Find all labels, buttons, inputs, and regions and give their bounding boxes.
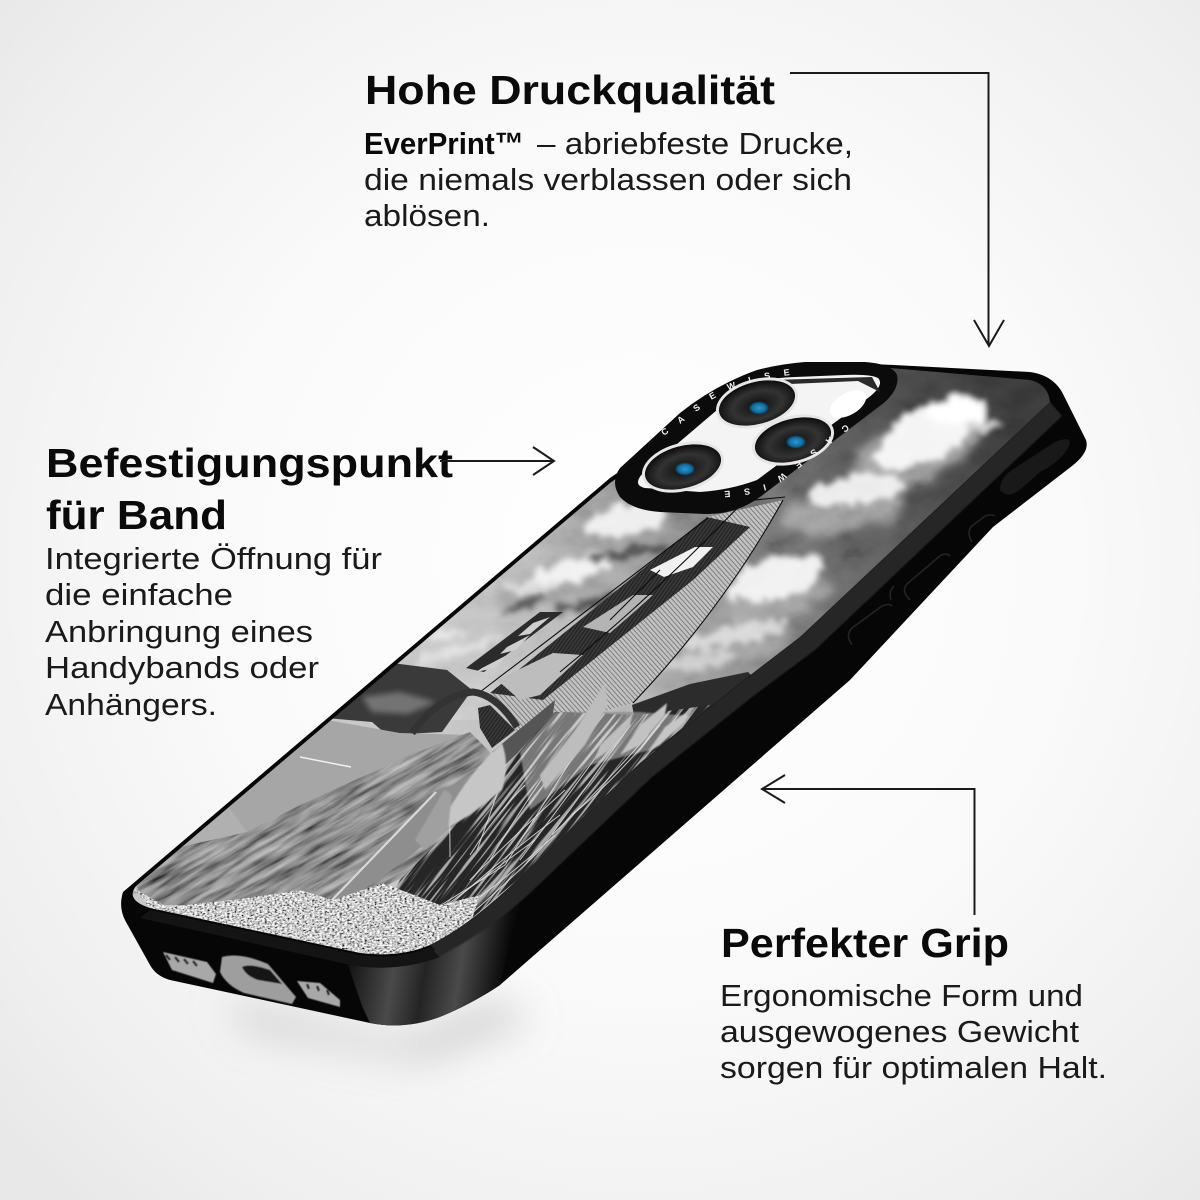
callout: Befestigungspunkt xyxy=(45,440,554,722)
description: ausgewogenes Gewicht xyxy=(720,1014,1079,1049)
arch and fort xyxy=(412,692,555,765)
glossy lower corner xyxy=(348,900,520,1025)
water xyxy=(130,720,470,895)
lens top xyxy=(710,369,804,437)
ring branding lower: CASEWISE xyxy=(724,425,848,498)
headland xyxy=(136,732,490,905)
side switch xyxy=(1000,439,1070,495)
description xyxy=(45,541,382,722)
description: – abriebfeste Drucke, xyxy=(537,126,853,161)
description: die niemals verblassen oder sich xyxy=(364,162,852,197)
printed photo xyxy=(132,368,1050,954)
callout: Hohe Druckqualität xyxy=(364,67,1004,346)
main tower xyxy=(480,497,785,703)
bottom ports xyxy=(163,952,340,1007)
clouds xyxy=(414,381,1005,683)
heading xyxy=(46,440,453,538)
description: Ergonomische Form und xyxy=(720,978,1083,1013)
bridge roadway fan xyxy=(490,500,783,735)
arrow: to camera ring xyxy=(440,447,554,475)
description: Anbringung eines xyxy=(45,614,313,649)
description: sorgen für optimalen Halt. xyxy=(720,1050,1107,1085)
description: Integrierte Öffnung für xyxy=(45,541,382,576)
camera glass xyxy=(638,375,880,492)
arrow: to case side xyxy=(762,775,974,915)
description xyxy=(364,126,853,233)
sky texture xyxy=(420,360,1070,720)
pampas plumes xyxy=(415,683,687,850)
description xyxy=(720,978,1107,1085)
right side edge band xyxy=(430,402,1062,956)
camera ring xyxy=(615,362,898,514)
lens left xyxy=(636,433,730,501)
camera module xyxy=(615,362,898,514)
light rock xyxy=(182,808,246,846)
description: Handybands oder xyxy=(45,650,319,685)
foreground bright grass xyxy=(133,883,480,954)
far tower xyxy=(466,612,563,672)
grass dark base xyxy=(396,712,655,942)
lens right xyxy=(746,406,840,474)
road xyxy=(340,785,464,898)
description: EverPrint™ xyxy=(364,126,524,161)
heading: Perfekter Grip xyxy=(721,920,1009,966)
phone shadow xyxy=(220,1000,530,1060)
callout: Perfekter Grip xyxy=(720,775,1107,1085)
description: Anhängers. xyxy=(45,687,217,722)
grass streak texture xyxy=(396,705,710,912)
heading: für Band xyxy=(46,492,227,538)
arrow: to case surface xyxy=(790,73,1004,346)
lower rim of photo xyxy=(140,910,440,968)
mid pale grass zone xyxy=(520,712,690,810)
phone case body xyxy=(121,362,1087,1025)
heading: Befestigungspunkt xyxy=(46,440,453,486)
description: die einfache xyxy=(45,577,233,612)
ring branding: CASEWISE xyxy=(662,369,790,435)
heading: Hohe Druckqualität xyxy=(365,67,775,113)
sky xyxy=(132,368,1050,954)
distant hills xyxy=(326,663,472,735)
phone illustration xyxy=(121,362,1087,1026)
side buttons xyxy=(848,515,995,645)
pampas grass xyxy=(440,724,660,912)
description: ablösen. xyxy=(364,198,490,233)
right hill xyxy=(632,672,751,751)
